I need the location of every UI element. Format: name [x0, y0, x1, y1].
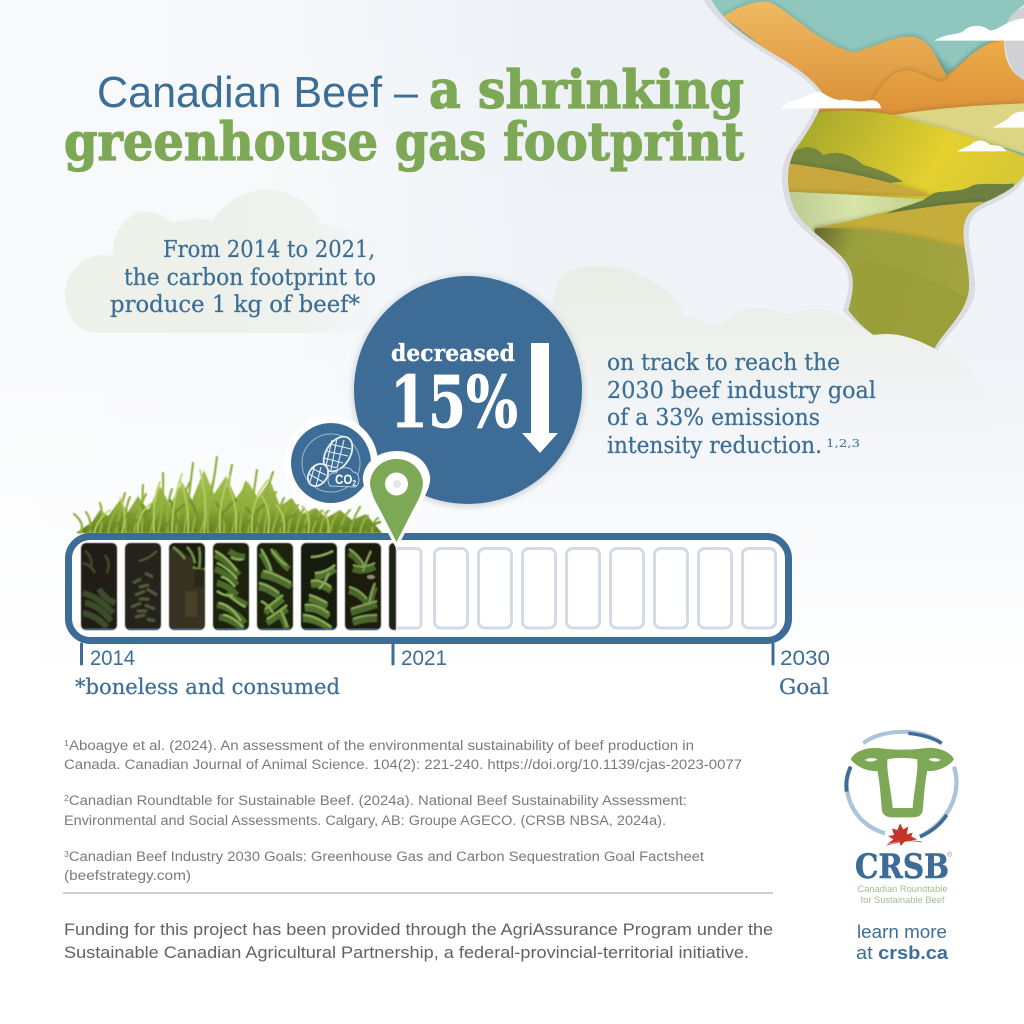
- references: [64, 738, 742, 883]
- down arrow: [522, 343, 558, 453]
- pale field lower: [783, 192, 925, 230]
- pale field: [893, 103, 1024, 153]
- right bushes: [886, 183, 1014, 214]
- references: Canadian Roundtable for Sustainable Beef. (2024a). National Beef Sustainability Assessment:: [69, 793, 687, 808]
- goal label: Goal: [779, 675, 829, 699]
- back mountains: [723, 1, 1024, 120]
- clouds on scene: [781, 18, 1024, 151]
- cow head: [851, 748, 954, 817]
- on track text: of a 33% emissions: [607, 405, 820, 431]
- title: [64, 60, 744, 173]
- CO2 label: 2: [352, 479, 356, 488]
- year 2014: 2014: [90, 647, 135, 670]
- references: Canada. Canadian Journal of Animal Science. 104(2): 221-240. https://doi.org/10.1139/cjas-2023-0077: [64, 757, 742, 772]
- 15 percent figure: 15%: [390, 360, 518, 444]
- CO2 label: CO: [335, 471, 356, 487]
- maple leaf: [887, 823, 917, 846]
- intro text: [110, 237, 376, 318]
- on track text: on track to reach the: [607, 350, 840, 376]
- progress bar frame: [68, 536, 788, 640]
- cloud middle left: [781, 92, 881, 108]
- intro text: the carbon footprint to: [124, 265, 376, 291]
- sky shade: [723, 17, 1024, 113]
- ring arcs: [846, 732, 956, 837]
- intro text: produce 1 kg of beef*: [110, 292, 360, 318]
- small cloud: [957, 141, 1007, 151]
- boot heel: [304, 460, 332, 490]
- funding statement: [64, 920, 773, 962]
- intro text: From 2014 to 2021,: [163, 237, 375, 263]
- CRSB logo: [846, 732, 956, 906]
- grass: [74, 457, 382, 533]
- title line 1 light: Canadian Beef –: [97, 68, 419, 117]
- filled progress strips: [81, 543, 396, 630]
- references: 3: [64, 850, 69, 859]
- landscape illustration: [680, 0, 1024, 353]
- on track text: intensity reduction.: [607, 433, 822, 459]
- lower gold field: [813, 202, 983, 267]
- logo subtitle line 2: for Sustainable Beef: [860, 895, 945, 906]
- CO2 cloud outline: [328, 468, 359, 487]
- white bite shadow: [1005, 7, 1024, 80]
- references: 2: [64, 794, 69, 803]
- cloud right: [993, 112, 1024, 128]
- title line 2 bold: greenhouse gas footprint: [64, 112, 744, 173]
- left cloud: [65, 190, 400, 333]
- on track text: [607, 350, 876, 459]
- references: (beefstrategy.com): [64, 868, 191, 883]
- references: 1: [64, 739, 70, 748]
- title line 1 bold: a shrinking: [429, 60, 744, 121]
- on track text: 1,2,3: [826, 436, 860, 450]
- timeline ticks: [82, 644, 773, 664]
- yellow hill: [780, 111, 1024, 233]
- bushes back: [788, 147, 904, 183]
- scene: [712, 0, 1024, 349]
- CO2 footprint icon: [284, 416, 378, 510]
- boneless note: *boneless and consumed: [75, 675, 340, 699]
- empty progress strips: [396, 548, 776, 628]
- funding statement: Funding for this project has been provided through the AgriAssurance Program under the: [64, 920, 773, 939]
- paper cut edge: [704, 0, 1024, 352]
- front mountain: [868, 40, 1024, 112]
- cloud top right: [934, 18, 1024, 41]
- registered mark: ®: [947, 851, 953, 859]
- references: Aboagye et al. (2024). An assessment of the environmental sustainability of beef production in: [69, 738, 694, 753]
- year 2030: 2030: [780, 647, 830, 670]
- references: Canadian Beef Industry 2030 Goals: Greenhouse Gas and Carbon Sequestration Goal Factsheet: [69, 849, 704, 864]
- logo subtitle: Canadian Roundtable: [858, 884, 948, 895]
- decreased label: decreased: [391, 340, 515, 367]
- CRSB wordmark: CRSB: [855, 847, 949, 887]
- olive field: [813, 228, 973, 353]
- big circle callout: [352, 275, 584, 507]
- location pin: [363, 451, 430, 549]
- darker bottom fold: [858, 298, 967, 348]
- year 2021: 2021: [401, 647, 447, 670]
- ochre band: [787, 163, 937, 197]
- funding statement: Sustainable Canadian Agricultural Partnership, a federal-provincial-territorial initiative.: [64, 943, 749, 962]
- learn more link: [856, 922, 949, 963]
- boot sole: [318, 432, 358, 476]
- references: Environmental and Social Assessments. Calgary, AB: Groupe AGECO. (CRSB NBSA, 2024a).: [64, 813, 666, 828]
- right cloud: [553, 266, 990, 455]
- learn more link: at crsb.ca: [856, 943, 949, 963]
- on track text: 2030 beef industry goal: [607, 378, 876, 404]
- learn more link: learn more: [857, 922, 947, 942]
